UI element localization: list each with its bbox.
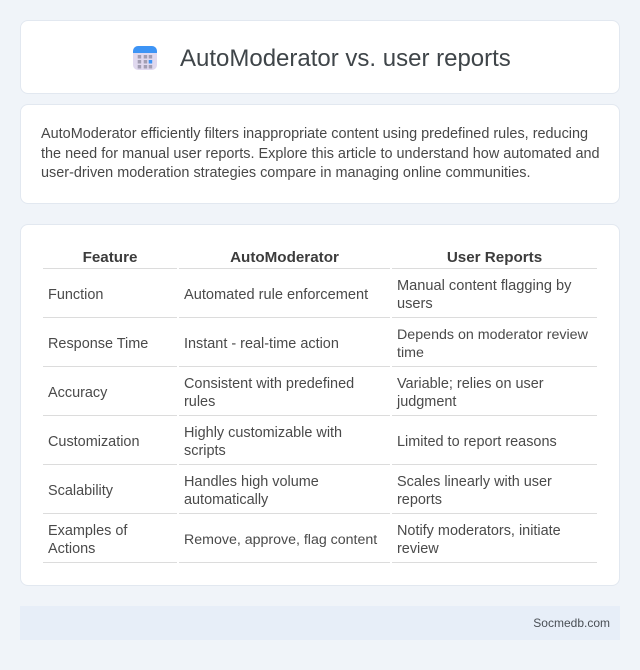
intro text: the need for manual user reports. Explore this article to understand how automated and	[41, 146, 600, 162]
row: response time: time	[397, 345, 424, 361]
row: examples of actions	[48, 523, 561, 557]
intro text: AutoModerator efficiently filters inappropriate content using predefined rules, reducing	[41, 126, 588, 142]
row: scalability: automatically	[184, 492, 268, 508]
row: function	[48, 278, 572, 312]
row: response time	[48, 327, 588, 361]
row: examples of actions: Actions	[48, 541, 95, 557]
row: accuracy: rules	[184, 394, 215, 410]
row: response time: Instant - real-time action	[184, 336, 339, 352]
row: customization	[48, 425, 557, 459]
row: function: Automated rule enforcement	[184, 287, 368, 303]
panel: introduction	[20, 104, 620, 204]
table header: User Reports	[447, 249, 542, 266]
row: function: users	[397, 296, 433, 312]
row: scalability: Scalability	[48, 483, 113, 499]
row: customization: Limited to report reasons	[397, 434, 557, 450]
row: customization: Highly customizable with	[184, 425, 342, 441]
row: examples of actions: Examples of	[48, 523, 127, 539]
row: customization: scripts	[184, 443, 226, 459]
table header: Feature	[83, 249, 137, 266]
panel: title card	[20, 20, 620, 94]
row: accuracy: judgment	[397, 394, 456, 410]
title: AutoModerator vs. user reports	[180, 45, 511, 72]
row: examples of actions: Notify moderators, initiate	[397, 523, 561, 539]
row: scalability: Scales linearly with user	[397, 474, 552, 490]
table header	[83, 249, 542, 266]
row: accuracy: Variable; relies on user	[397, 376, 544, 392]
table header: AutoModerator	[230, 249, 339, 266]
row: scalability: Handles high volume	[184, 474, 319, 490]
intro text: user-driven moderation strategies compare in managing online communities.	[41, 165, 531, 181]
footer bar	[20, 606, 620, 640]
row: accuracy: Consistent with predefined	[184, 376, 354, 392]
row: accuracy: Accuracy	[48, 385, 107, 401]
footer source text: Socmedb.com	[533, 616, 610, 630]
row: function: Function	[48, 287, 103, 303]
row: examples of actions: Remove, approve, flag content	[184, 532, 377, 548]
icon: calendar	[133, 46, 157, 70]
row: examples of actions: review	[397, 541, 439, 557]
row: function: Manual content flagging by	[397, 278, 571, 294]
row: response time: Depends on moderator review	[397, 327, 588, 343]
row: scalability: reports	[397, 492, 442, 508]
row: accuracy	[48, 376, 544, 410]
row: customization: Customization	[48, 434, 139, 450]
row: response time: Response Time	[48, 336, 148, 352]
comparison table	[43, 249, 597, 563]
intro text	[41, 126, 600, 181]
row: scalability	[48, 474, 552, 508]
panel: comparison table	[20, 224, 620, 586]
